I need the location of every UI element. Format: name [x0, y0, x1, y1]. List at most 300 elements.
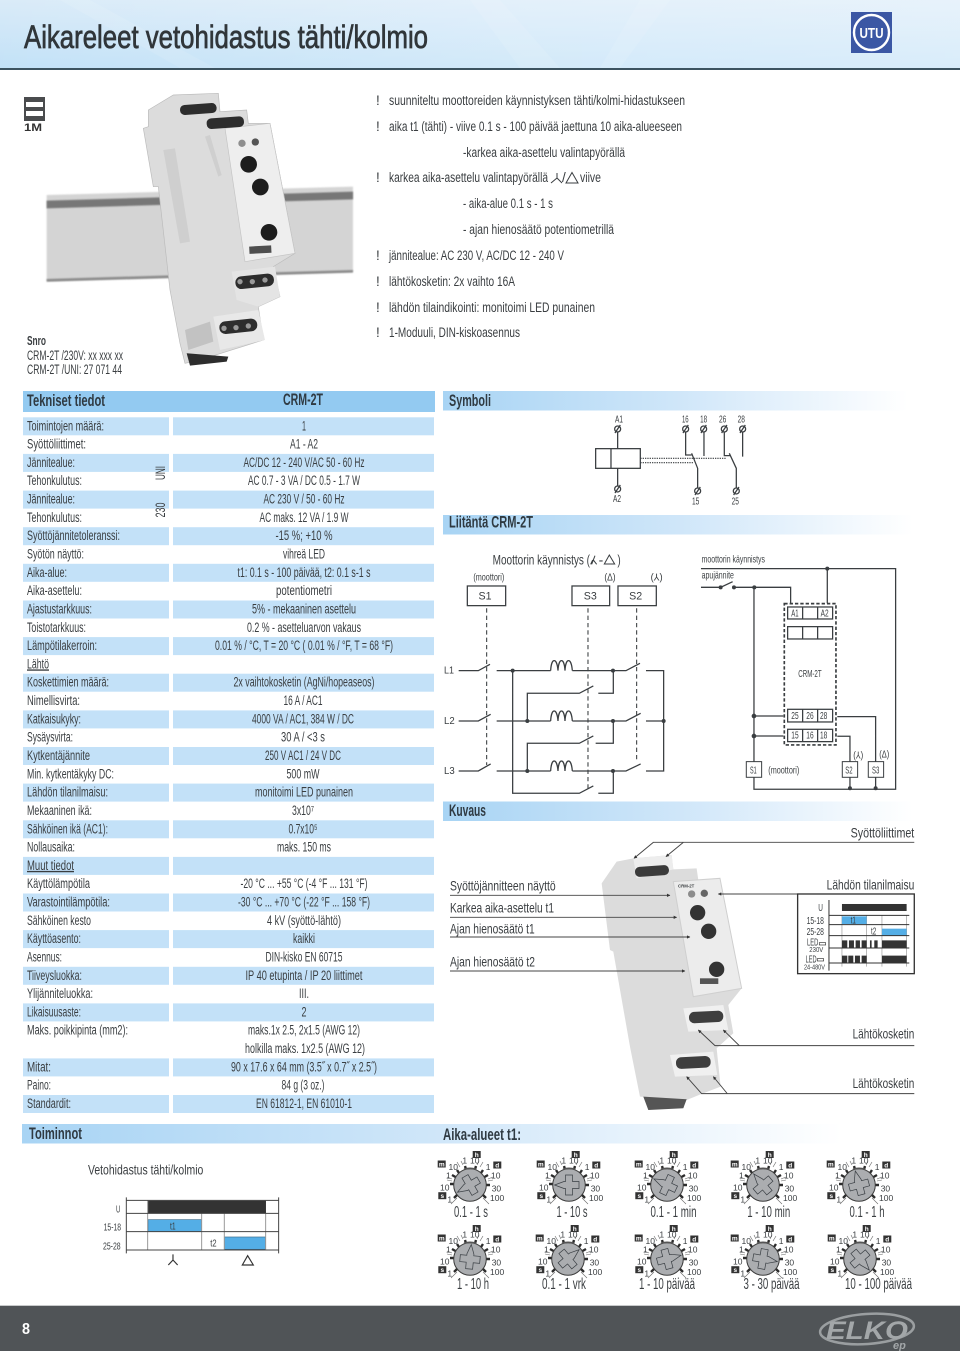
- time range dial: 1 - 10 päivää: d: [692, 1236, 696, 1243]
- row: 4000 VA / AC1, 384 W / DC: [252, 711, 354, 726]
- time range dial: 1 - 10 päivää: m: [636, 1235, 642, 1242]
- row: [23, 967, 434, 985]
- time range dial: 10 - 100 päivää: [828, 1225, 912, 1293]
- wiring diagram: motor start: Moottorin käynnistys (: [493, 551, 590, 567]
- row: AC maks. 12 VA / 1.9 W: [260, 510, 349, 525]
- row: [27, 1023, 360, 1038]
- row: 250 V AC1 / 24 V DC: [265, 748, 341, 763]
- time range dial: 1 - 10 s: 1: [545, 1170, 550, 1180]
- time range dial: 0.1 - 1 h: [827, 1151, 893, 1221]
- time range dial: 1 - 10 h: 1: [462, 1229, 467, 1239]
- time range dial: 0.1 - 1 vrk: h: [573, 1226, 577, 1233]
- time range dial: 1 - 10 s: 10: [539, 1183, 549, 1193]
- time range dial: 1 - 10 päivää: 10: [688, 1244, 698, 1254]
- table header: CRM-2T: [283, 390, 323, 409]
- row: Toimintojen määrä:: [27, 418, 104, 433]
- time range dial: 0.1 - 1 h: 30: [881, 1184, 890, 1194]
- time range dial: 3 - 30 päivää: 3 - 30 päivää: [744, 1276, 800, 1293]
- time range dial: 0.1 - 1 min: 1: [683, 1162, 688, 1172]
- time range dial: 0.1 - 1 min: h: [672, 1152, 676, 1159]
- time range dial: 1 - 10 päivää: 10: [646, 1236, 655, 1246]
- time range dial: 0.1 - 1 vrk: 1: [584, 1236, 589, 1246]
- row heading: Muut tiedot: [27, 858, 74, 873]
- time range dial: 3 - 30 päivää: 1: [779, 1236, 784, 1246]
- wiring diagram: motor start: (Δ): [604, 573, 616, 584]
- row: DIN-kisko EN 60715: [266, 950, 342, 964]
- wiring diagram: motor start: (⅄): [651, 573, 663, 584]
- row: [23, 784, 434, 802]
- time range dial: 0.1 - 1 h: 10: [880, 1170, 890, 1180]
- time range dial: 0.1 - 1 s: 10: [470, 1155, 480, 1165]
- wiring diagram: motor start: (moottori): [473, 573, 504, 584]
- feature list: suunniteltu moottoreiden käynnistyksen tähti/kolmi-hidastukseen: [389, 93, 685, 108]
- function chart: t1: [170, 1221, 176, 1232]
- time range dial: 1 - 10 päivää: 1: [643, 1244, 648, 1254]
- output indication timing chart: LED: [806, 955, 817, 966]
- row: [23, 454, 434, 472]
- row: Mitat:: [27, 1059, 51, 1074]
- row: Jännitealue:: [27, 455, 75, 470]
- time range dial: 1 - 10 s: d: [594, 1162, 598, 1169]
- description: labelled relay photo: Syöttöliittimet: [851, 825, 914, 841]
- time range dial: 1 - 10 min: h: [768, 1152, 772, 1159]
- time range dial: 1 - 10 min: 1: [740, 1194, 745, 1204]
- time range dial: 0.1 - 1 vrk: 1: [544, 1244, 549, 1254]
- time range dial: 1 - 10 min: m: [732, 1161, 738, 1168]
- time range dial: 0.1 - 1 s: 30: [492, 1184, 501, 1194]
- time range dial: 10 - 100 päivää: 10: [830, 1257, 840, 1267]
- row: Toistotarkkuus:: [27, 620, 86, 635]
- row: [23, 417, 434, 435]
- row: Lähdön tilanilmaisu:: [27, 785, 108, 800]
- row: IP 40 etupinta / IP 20 liittimet: [246, 968, 363, 983]
- row: [27, 986, 309, 1001]
- description: labelled relay photo: Karkea aika-asettelu t1: [450, 900, 554, 916]
- time range dial: 3 - 30 päivää: [731, 1225, 800, 1293]
- time range dial: 3 - 30 päivää: m: [732, 1235, 738, 1242]
- time range dial: 0.1 - 1 s: 1: [447, 1194, 452, 1204]
- time range dial: 1 - 10 h: 1: [447, 1268, 452, 1278]
- leader lines and arrows: [450, 842, 914, 1094]
- row: 500 mW: [286, 766, 320, 781]
- row: [27, 876, 368, 891]
- symbol diagram: 16: [682, 414, 689, 425]
- row: holkilla maks. 1x2.5 (AWG 12): [245, 1041, 365, 1056]
- wiring diagram: relay connection: [701, 554, 896, 790]
- row: [27, 1078, 324, 1093]
- terminals 15 16 18: 15: [791, 731, 799, 742]
- time range dial: 10 - 100 päivää: 10: [881, 1244, 891, 1254]
- row: Aika-alue:: [27, 565, 67, 580]
- time range dial: 1 - 10 min: 100: [783, 1193, 797, 1203]
- row: [27, 546, 325, 562]
- time range dial: 0.1 - 1 min: 10: [688, 1170, 698, 1180]
- time range dial: 1 - 10 h: d: [495, 1236, 499, 1243]
- time range dial: 0.1 - 1 s: 10: [491, 1170, 501, 1180]
- time range dial: 0.1 - 1 h: 1: [835, 1170, 840, 1180]
- footer: [0, 1305, 960, 1351]
- time range dial: 0.1 - 1 h: 1: [875, 1162, 880, 1172]
- row: [27, 766, 320, 781]
- row: Kytkentäjännite: [27, 748, 90, 763]
- logo: ELKO ep: ELKO: [826, 1317, 909, 1345]
- time range dial: 0.1 - 1 vrk: 0.1 - 1 vrk: [542, 1276, 587, 1293]
- feature list: !: [376, 170, 380, 185]
- function chart: t2: [210, 1239, 217, 1250]
- description: labelled relay photo: Ajan hienosäätö t1: [450, 920, 535, 936]
- row: [27, 437, 318, 452]
- voltage variant labels: UNI: [153, 466, 168, 480]
- time range dial: 10 - 100 päivää: h: [865, 1226, 869, 1233]
- row: Likaisuusaste:: [27, 1004, 81, 1019]
- row: Standardit:: [27, 1096, 71, 1111]
- feature list: - aika-alue 0.1 s - 1 s: [463, 196, 553, 211]
- wiring diagram: relay connection: S3: [872, 765, 879, 776]
- terminals 15 16 18: [788, 729, 833, 742]
- time range dial: 1 - 10 h: 10: [448, 1236, 458, 1246]
- time range dial: 1 - 10 s: s: [539, 1193, 543, 1200]
- time range dial: 1 - 10 s: [537, 1151, 603, 1221]
- row: [23, 930, 434, 948]
- time range dial: 0.1 - 1 s: 100: [490, 1193, 504, 1203]
- function chart: 25-28: [103, 1241, 121, 1252]
- time range dial: 0.1 - 1 h: d: [884, 1162, 888, 1169]
- symbol diagram: A1: [615, 415, 623, 426]
- time range dial: 0.1 - 1 h: 100: [879, 1193, 893, 1203]
- row: -15 %; +10 %: [276, 528, 332, 543]
- heading: Kuvaus: Kuvaus: [449, 801, 486, 820]
- time range dial: 10 - 100 päivää: 1: [836, 1244, 841, 1254]
- logo: UTU: UTU: [860, 25, 884, 42]
- row: 30 A / <3 s: [281, 730, 325, 745]
- time range dial: 1 - 10 h: m: [439, 1235, 445, 1242]
- row: [23, 1095, 434, 1113]
- terminals A1 A2: [788, 607, 833, 620]
- time range dial: 0.1 - 1 min: m: [636, 1161, 642, 1168]
- wiring diagram: relay connection: CRM-2T: [798, 669, 822, 680]
- time range dial: 3 - 30 päivää: s: [733, 1267, 737, 1274]
- row: Ajastustarkkuus:: [27, 602, 92, 616]
- time range dial: 10 - 100 päivää: 10 - 100 päivää: [845, 1276, 912, 1293]
- row: t1: 0.1 s - 100 päivää, t2: 0.1 s-1 s: [238, 565, 371, 580]
- output indication timing chart: LED: [807, 938, 818, 949]
- time range dial: 10 - 100 päivää: 100: [880, 1267, 894, 1277]
- row: III.: [299, 986, 309, 1001]
- wiring diagram: motor start: L1: [444, 666, 454, 677]
- heading: Liitäntä CRM-2T: [443, 512, 913, 534]
- time range dial: 0.1 - 1 min: 100: [687, 1193, 701, 1203]
- row: [27, 840, 331, 855]
- time range dial: 1 - 10 min: s: [733, 1193, 737, 1200]
- time range dial: 10 - 100 päivää: 1: [852, 1229, 857, 1239]
- row: [27, 803, 314, 818]
- row: 0.01 % / °C, T = 20 °C ( 0.01 % / °F, T = 68 °F): [215, 638, 393, 653]
- time range dial: 0.1 - 1 h: 1: [836, 1194, 841, 1204]
- feature list: viive: [580, 170, 601, 185]
- row: monitoimi LED punainen: [255, 785, 353, 800]
- row heading: Lähtö: [27, 656, 49, 671]
- row: Käyttölämpötila: [27, 876, 90, 891]
- heading: Liitäntä CRM-2T: Liitäntä CRM-2T: [449, 512, 533, 532]
- time range dial: 1 - 10 s: 1: [585, 1162, 590, 1172]
- time range dial: 0.1 - 1 min: 10: [646, 1162, 655, 1172]
- wiring diagram: motor start: L2: [444, 716, 455, 727]
- wiring diagram: relay connection: moottorin käynnistys: [702, 554, 765, 565]
- time range dial: 1 - 10 min: 10: [763, 1155, 773, 1165]
- time range dial: 3 - 30 päivää: 1: [739, 1244, 744, 1254]
- time range dial: 1 - 10 h: 1: [486, 1236, 491, 1246]
- row: [23, 527, 434, 545]
- description: labelled relay photo: Lähdön tilanilmaisu: [827, 876, 914, 892]
- feature list: !: [376, 325, 380, 340]
- function chart: Vetohidastus tähti/kolmio: [88, 1161, 203, 1177]
- time range dial: 1 - 10 h: 10: [491, 1244, 501, 1254]
- row: 0.2 % - asetteluarvon vakaus: [247, 620, 361, 635]
- time range dial: 1 - 10 s: 100: [589, 1193, 603, 1203]
- feature list: !: [376, 274, 380, 289]
- row: 4 kV (syöttö-lähtö): [267, 913, 341, 928]
- title: Aikareleet vetohidastus tähti/kolmio: [24, 19, 428, 55]
- symbol diagram: A2: [613, 494, 621, 505]
- description: labelled relay photo: Ajan hienosäätö t2: [450, 954, 535, 970]
- feature list: !: [376, 93, 380, 108]
- time range dial: 0.1 - 1 s: h: [475, 1152, 479, 1159]
- wiring diagram: motor start: -: [599, 551, 604, 567]
- row: [23, 637, 434, 655]
- symbol diagram: 18: [700, 414, 707, 425]
- output indication timing chart: [798, 894, 914, 974]
- wiring diagram: relay connection: (moottori): [768, 765, 799, 776]
- row: -30 °C ... +70 °C (-22 °F ... 158 °F): [238, 894, 370, 910]
- row: Min. kytkentäkyky DC:: [27, 766, 114, 781]
- page number: 8: [22, 1321, 30, 1338]
- symbol diagram: 25: [732, 496, 739, 507]
- time range dial: 0.1 - 1 vrk: 10: [568, 1229, 578, 1239]
- row: [23, 600, 434, 618]
- row: AC/DC 12 - 240 V/AC 50 - 60 Hz: [244, 455, 365, 470]
- time range dial: 0.1 - 1 s: 1: [486, 1162, 491, 1172]
- time range dial: 0.1 - 1 min: 10: [637, 1183, 647, 1193]
- row: Koskettimien määrä:: [27, 675, 109, 690]
- time range dial: 10 - 100 päivää: m: [829, 1235, 835, 1242]
- time range dial: 1 - 10 s: h: [574, 1152, 578, 1159]
- contactor S1: S1: [478, 590, 492, 602]
- time range dial: 10 - 100 päivää: 30: [882, 1258, 891, 1268]
- row: Lämpötilakerroin:: [27, 638, 97, 653]
- symbol diagram: 28: [738, 414, 745, 425]
- feature list: jännitealue: AC 230 V, AC/DC 12 - 240 V: [388, 248, 564, 263]
- table header: [23, 390, 435, 412]
- heading band: Toiminnot / Aika-alueet: Aika-alueet t1:: [443, 1125, 521, 1144]
- feature list: /: [562, 170, 566, 185]
- time range dial: 1 - 10 päivää: 10: [667, 1229, 677, 1239]
- heading: Symboli: Symboli: [449, 391, 491, 410]
- time range dial: 0.1 - 1 s: 1: [462, 1155, 467, 1165]
- time range dial: 0.1 - 1 min: 1: [643, 1170, 648, 1180]
- row: 5% - mekaaninen asettelu: [252, 602, 356, 616]
- time range dial: 3 - 30 päivää: d: [788, 1236, 792, 1243]
- time range dial: 0.1 - 1 h: 10: [859, 1155, 869, 1165]
- function chart: [88, 1161, 279, 1265]
- row: [23, 747, 434, 765]
- row: [23, 564, 434, 582]
- time range dial: 1 - 10 h: [438, 1225, 504, 1293]
- time range dial: 1 - 10 s: 1 - 10 s: [556, 1204, 588, 1221]
- time range dial: 1 - 10 päivää: [635, 1225, 701, 1293]
- wiring diagram: relay connection: S2: [845, 765, 853, 776]
- row: [27, 620, 361, 635]
- row: Sysäysvirta:: [27, 730, 73, 745]
- description: labelled relay photo: [450, 825, 914, 1110]
- time range dial: 0.1 - 1 min: 0.1 - 1 min: [650, 1204, 696, 1221]
- row: Tehonkulutus:: [27, 510, 82, 525]
- row: -20 °C ... +55 °C (-4 °F ... 131 °F): [240, 876, 368, 891]
- time range dial: 1 - 10 päivää: s: [637, 1267, 641, 1274]
- icon: 1M module: 1M: [24, 122, 42, 134]
- time range dial: 0.1 - 1 vrk: 10: [538, 1257, 548, 1267]
- terminals 25 26 28: [788, 709, 833, 722]
- panel: technical data table: [23, 390, 435, 1113]
- time range dial: 1 - 10 h: 30: [492, 1258, 501, 1268]
- time range dial: 1 - 10 h: 100: [490, 1267, 504, 1277]
- time range dial: 3 - 30 päivää: 30: [785, 1258, 794, 1268]
- time range dial: 0.1 - 1 vrk: 10: [589, 1244, 599, 1254]
- row: Paino:: [27, 1078, 51, 1093]
- contactor S3: S3: [584, 590, 597, 602]
- output indication timing chart: 230V: [809, 945, 823, 954]
- row: 90 x 17.6 x 64 mm (3.5˝ x 0.7˝ x 2.5˝): [231, 1059, 377, 1074]
- voltage variant labels: [153, 466, 168, 518]
- order numbers: [27, 333, 123, 377]
- feature list: !: [376, 248, 380, 263]
- time range dial: 0.1 - 1 h: h: [864, 1152, 868, 1159]
- terminals 15 16 18: 18: [820, 731, 827, 742]
- row: [27, 950, 342, 964]
- row: Sähköinen ikä (AC1):: [27, 821, 108, 836]
- feature list: lähdön tilaindikointi: monitoimi LED punainen: [389, 300, 595, 315]
- output indication timing chart: t1: [851, 915, 856, 926]
- row: 2: [302, 1004, 306, 1019]
- time range dial: 1 - 10 min: 1: [739, 1170, 744, 1180]
- time range dial: 1 - 10 min: 1: [755, 1155, 760, 1165]
- time range dial: 1 - 10 h: 10: [470, 1229, 480, 1239]
- row: [23, 1058, 434, 1076]
- contactor S2: [618, 586, 656, 606]
- row: Tiiveysluokka:: [27, 968, 82, 983]
- time range dial: 0.1 - 1 min: 1: [644, 1194, 649, 1204]
- time range dial: 0.1 - 1 h: 0.1 - 1 h: [850, 1204, 884, 1221]
- feature list: aika t1 (tähti) - viive 0.1 s - 100 päivää jaettuna 10 aika-alueeseen: [389, 119, 682, 134]
- time range dial: 10 - 100 päivää: 10: [860, 1229, 870, 1239]
- time range dial: 1 - 10 h: s: [440, 1267, 444, 1274]
- row: [23, 894, 434, 912]
- contactor S3: [572, 586, 610, 606]
- row: Katkaisukyky:: [27, 711, 81, 726]
- row: Jännitealue:: [27, 492, 75, 507]
- time range dial: 1 - 10 s: 10: [548, 1162, 557, 1172]
- time range dial: 0.1 - 1 vrk: 1: [560, 1229, 565, 1239]
- time range dial: 1 - 10 min: 10: [784, 1170, 794, 1180]
- terminals 25 26 28: 26: [806, 711, 814, 722]
- terminals 25 26 28: 28: [820, 711, 827, 722]
- order numbers: CRM-2T /UNI: 27 071 44: [27, 362, 122, 377]
- time range dial: 3 - 30 päivää: 1: [740, 1268, 745, 1278]
- output indication timing chart: 25-28: [807, 927, 824, 938]
- row: Käyttöasento:: [27, 931, 81, 946]
- row: Sähköinen kesto: [27, 913, 91, 928]
- voltage variant labels: 230: [153, 502, 168, 518]
- wiring diagram: relay connection: S1: [750, 765, 757, 776]
- row: Syötön näyttö:: [27, 546, 84, 562]
- row: 3x10⁷: [292, 803, 314, 818]
- time range dial: 0.1 - 1 min: 1: [659, 1155, 664, 1165]
- row: EN 61812-1, EN 61010-1: [256, 1096, 352, 1111]
- time range dial: 1 - 10 päivää: 10: [637, 1257, 647, 1267]
- time range dial: 0.1 - 1 h: s: [829, 1193, 833, 1200]
- time range dial: 0.1 - 1 vrk: 30: [590, 1258, 599, 1268]
- heading band: Toiminnot / Aika-alueet: [22, 1124, 842, 1144]
- icon: 1M module: [24, 97, 45, 134]
- row: [23, 820, 434, 838]
- terminals 25 26 28: 25: [791, 711, 799, 722]
- time range dial: 1 - 10 s: 30: [591, 1184, 600, 1194]
- time range dial: 0.1 - 1 h: 1: [851, 1155, 856, 1165]
- time range dial: 0.1 - 1 s: 0.1 - 1 s: [454, 1204, 488, 1221]
- feature list: -karkea aika-asettelu valintapyörällä: [463, 145, 625, 160]
- feature list: 1-Moduuli, DIN-kiskoasennus: [389, 325, 520, 340]
- time range dial: 10 - 100 päivää: 1: [876, 1236, 881, 1246]
- row: [23, 491, 434, 509]
- wiring diagram: motor start: ): [617, 551, 621, 567]
- feature list: - ajan hienosäätö potentiometrillä: [463, 222, 614, 237]
- time range dial: 1 - 10 min: d: [788, 1162, 792, 1169]
- contactor S2: S2: [629, 590, 642, 602]
- time range dial: 3 - 30 päivää: 10: [784, 1244, 794, 1254]
- time range dial: 0.1 - 1 s: s: [440, 1193, 444, 1200]
- time range dial: 0.1 - 1 s: [438, 1151, 504, 1221]
- time range dial: 3 - 30 päivää: 10: [742, 1236, 751, 1246]
- row: Nimellisvirta:: [27, 693, 80, 708]
- time range dial: 1 - 10 min: 1: [779, 1162, 784, 1172]
- feature list: [376, 93, 685, 340]
- row: maks.1x 2.5, 2x1.5 (AWG 12): [248, 1023, 360, 1038]
- time range dial: 0.1 - 1 vrk: [536, 1225, 602, 1293]
- time range dial: 1 - 10 min: 10: [733, 1183, 743, 1193]
- wiring diagram: relay connection: (⅄): [853, 750, 863, 761]
- time range dial: 1 - 10 h: 1 - 10 h: [457, 1276, 489, 1293]
- time range dial: 0.1 - 1 min: 10: [667, 1155, 677, 1165]
- row: Aika-asettelu:: [27, 583, 82, 598]
- time range dial: 1 - 10 min: [731, 1151, 797, 1221]
- description: labelled relay photo: Syöttöjännitteen näyttö: [450, 878, 556, 894]
- time range dial: 10 - 100 päivää: 1: [837, 1268, 842, 1278]
- time range dial: 1 - 10 h: 10: [440, 1257, 450, 1267]
- feature list: !: [376, 119, 380, 134]
- row: [27, 693, 322, 708]
- heading band: Toiminnot / Aika-alueet: Toiminnot: [29, 1124, 82, 1143]
- time range dial: 1 - 10 s: m: [538, 1161, 544, 1168]
- time range dial: 0.1 - 1 h: 10: [838, 1162, 847, 1172]
- time range dial: 0.1 - 1 vrk: d: [593, 1236, 597, 1243]
- wiring diagram: motor start: [444, 551, 666, 793]
- row: Tehonkulutus:: [27, 473, 82, 488]
- time range dial: 3 - 30 päivää: h: [768, 1226, 772, 1233]
- time range dial: 1 - 10 päivää: 1: [644, 1268, 649, 1278]
- time range dial: 0.1 - 1 min: d: [692, 1162, 696, 1169]
- time range dial: 0.1 - 1 s: 10: [448, 1162, 458, 1172]
- product photo: relay on DIN rail: [47, 93, 353, 366]
- row: potentiometri: [276, 583, 332, 598]
